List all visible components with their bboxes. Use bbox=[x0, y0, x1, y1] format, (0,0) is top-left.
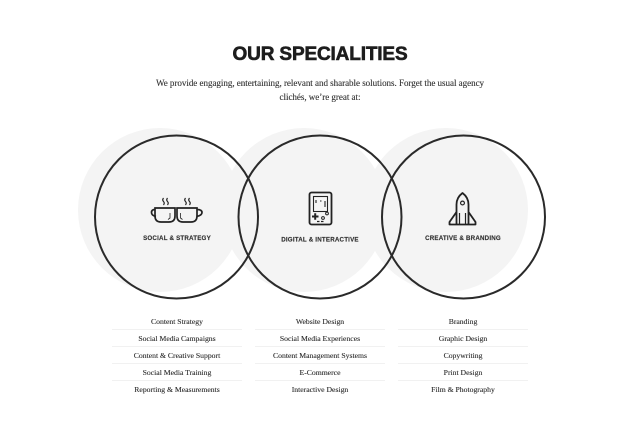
list: social and strategy: Social Media Training bbox=[143, 368, 211, 377]
list: social and strategy: Content & Creative Support bbox=[134, 351, 220, 360]
list: creative and branding bbox=[398, 317, 528, 394]
list: digital and interactive: Website Design bbox=[296, 317, 344, 326]
list: creative and branding: Branding bbox=[449, 317, 477, 326]
list: creative and branding: Copywriting bbox=[444, 351, 482, 360]
list: digital and interactive: E-Commerce bbox=[300, 368, 340, 377]
list: creative and branding: Print Design bbox=[444, 368, 482, 377]
icon: handheld game console bbox=[310, 192, 332, 224]
label: social and strategy: SOCIAL & STRATEGY bbox=[143, 235, 212, 242]
list: digital and interactive: Interactive Design bbox=[292, 385, 348, 394]
label: creative and branding: CREATIVE & BRANDING bbox=[425, 235, 501, 242]
intro text bbox=[156, 78, 484, 102]
intro text: clichés, we’re great at: bbox=[280, 92, 360, 102]
icon: coffee cups bbox=[152, 198, 202, 222]
intro text: We provide engaging, entertaining, relevant and sharable solutions. Forget the usual agency bbox=[156, 78, 484, 88]
list: social and strategy: Reporting & Measurements bbox=[134, 385, 220, 394]
title: OUR SPECIALITIES bbox=[233, 44, 407, 65]
list: digital and interactive bbox=[255, 317, 385, 394]
list: digital and interactive: Content Management Systems bbox=[273, 351, 367, 360]
list: social and strategy: Social Media Campaigns bbox=[138, 334, 216, 343]
outlined circles bbox=[95, 136, 545, 298]
list: creative and branding: Film & Photography bbox=[431, 385, 495, 394]
grey background circles bbox=[78, 128, 528, 292]
list: creative and branding: Graphic Design bbox=[439, 334, 487, 343]
label: digital and interactive: DIGITAL & INTERACTIVE bbox=[281, 236, 359, 244]
list: digital and interactive: Social Media Experiences bbox=[280, 334, 360, 343]
list: social and strategy: Content Strategy bbox=[151, 317, 203, 326]
icon: rocket bbox=[450, 193, 476, 224]
list: social and strategy bbox=[112, 317, 242, 394]
